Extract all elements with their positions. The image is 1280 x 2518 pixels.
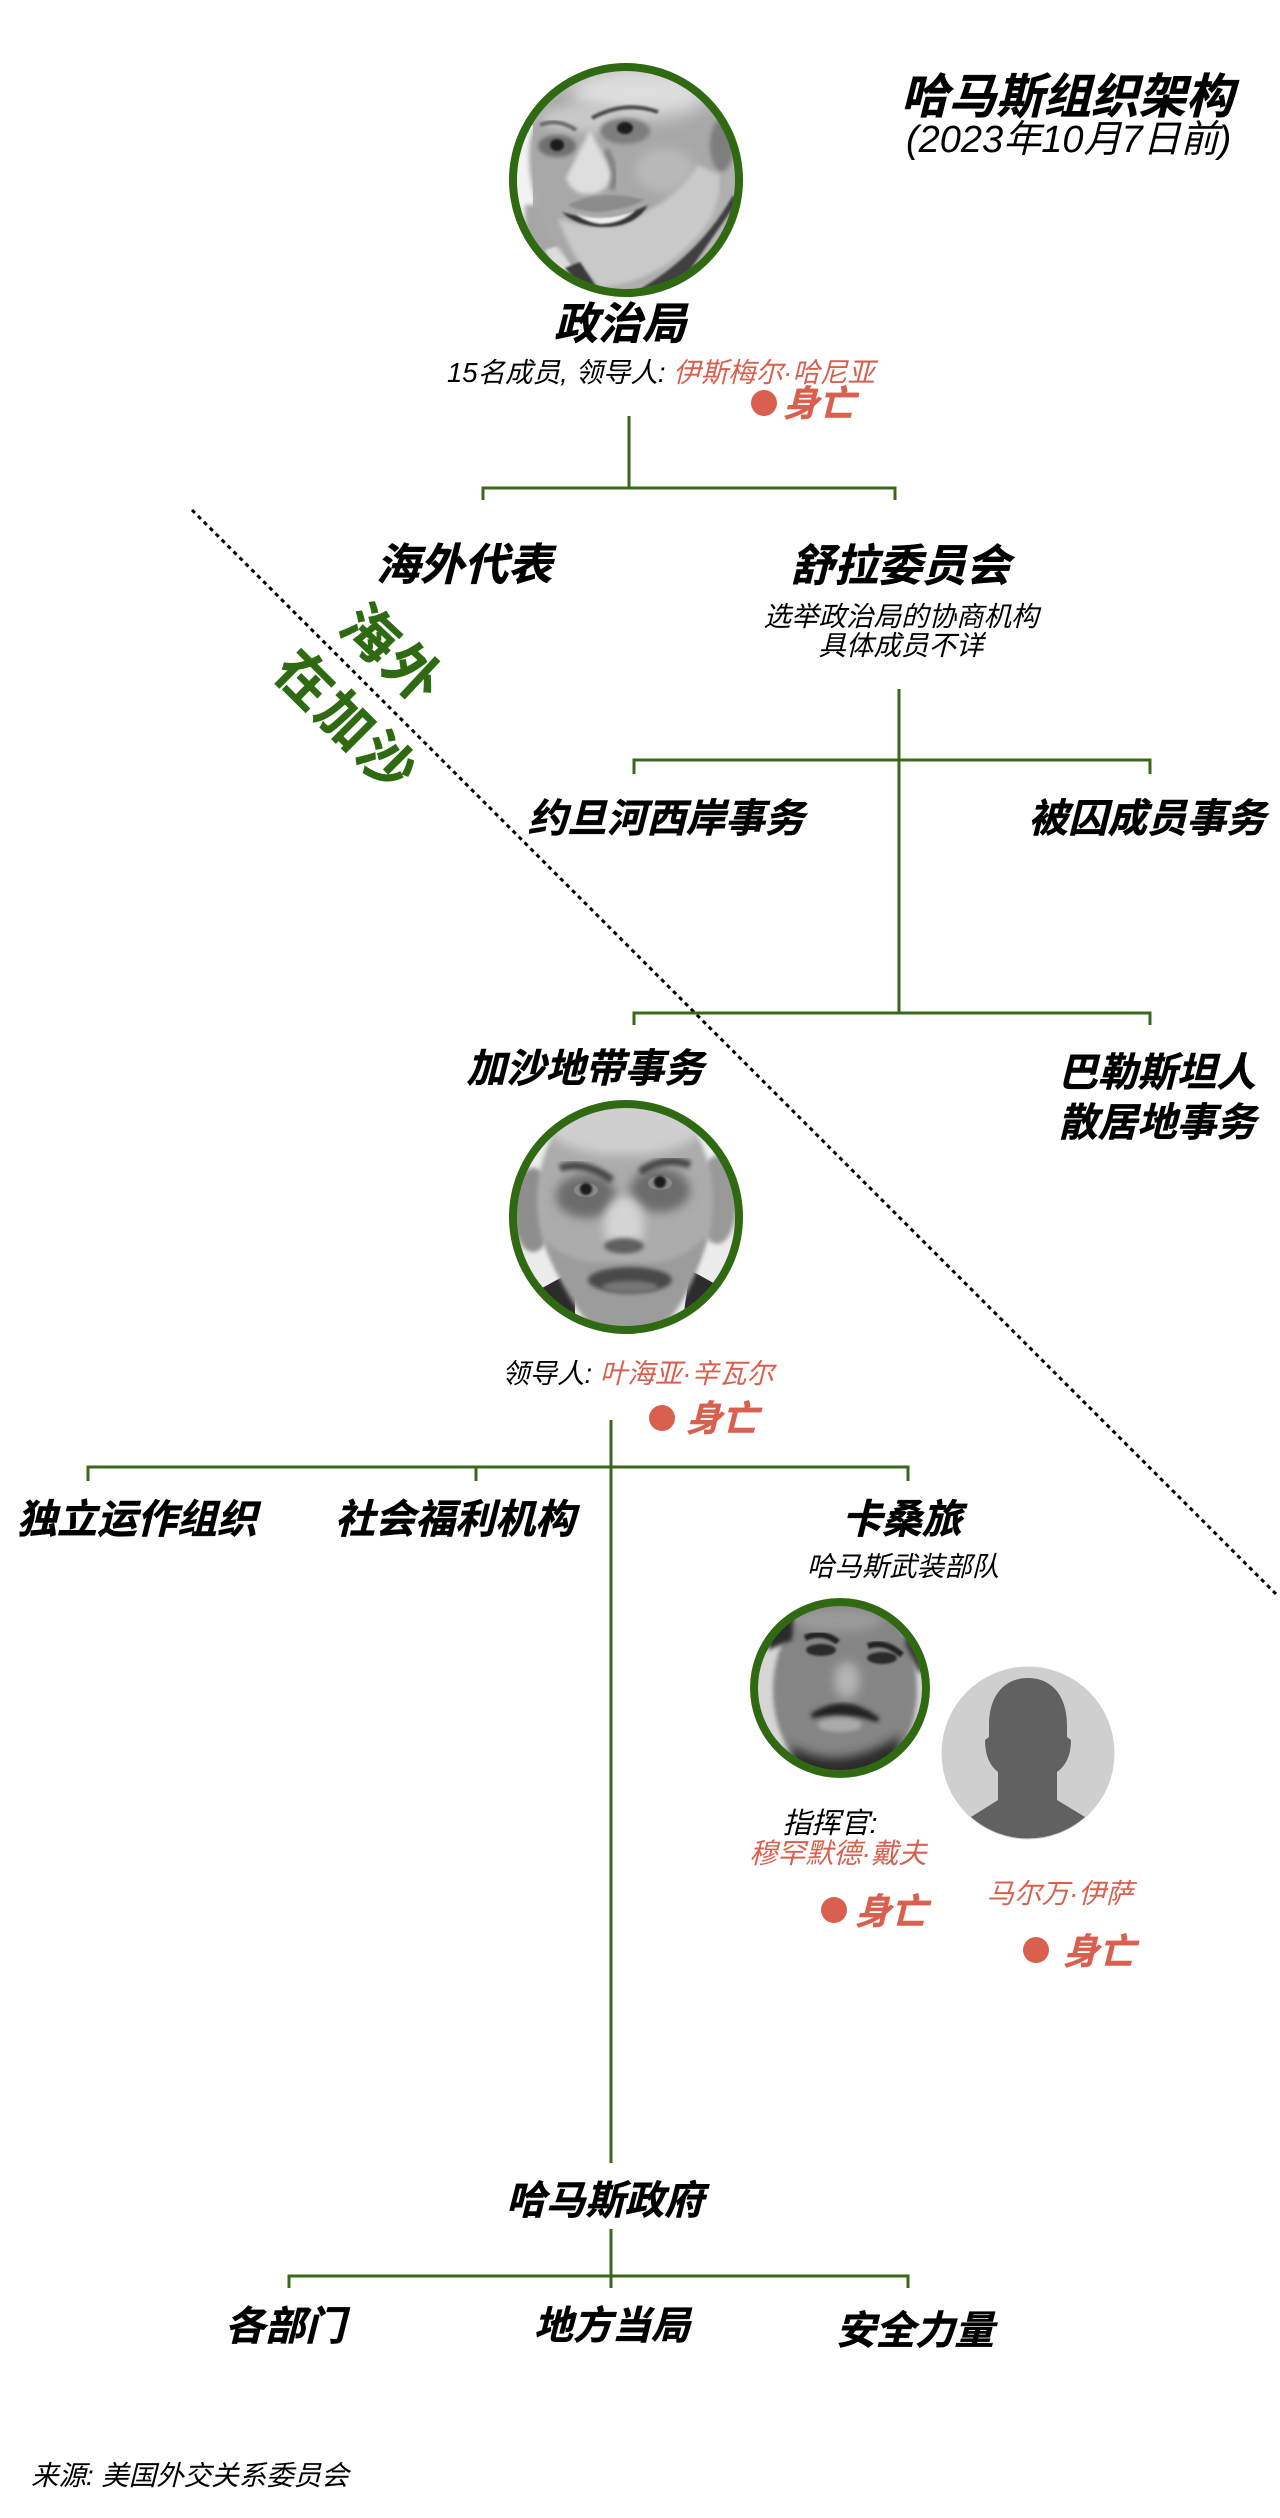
beard	[558, 165, 720, 287]
photo: qassam commander	[750, 1594, 930, 1786]
mouth	[562, 205, 648, 227]
label: in Gaza: 在加沙	[263, 638, 430, 805]
commander caption	[749, 1808, 932, 1932]
status: deceased: 身亡	[1063, 1931, 1140, 1972]
node: local authorities: 地方当局	[534, 2305, 693, 2348]
source note: 来源: 美国外交关系委员会	[31, 2460, 351, 2491]
label: overseas: 海外	[329, 592, 456, 717]
node: overseas representatives: 海外代表	[376, 541, 557, 590]
divider: overseas vs in Gaza	[192, 510, 1277, 1595]
node: social welfare institutions: 社会福利机构	[335, 1498, 580, 1542]
shura description: 具体成员不详	[818, 630, 987, 661]
qassam description: 哈马斯武装部队	[807, 1551, 999, 1582]
nose	[566, 130, 612, 194]
shura description: 选举政治局的协商机构	[764, 601, 1042, 632]
status: deceased	[751, 383, 860, 424]
second person caption	[987, 1878, 1140, 1972]
heading: politburo: 政治局	[554, 300, 689, 349]
shura description	[764, 601, 1042, 661]
node: shura council	[764, 542, 1042, 661]
status: deceased: 身亡	[855, 1891, 932, 1932]
node: palestinian diaspora affairs	[1058, 1051, 1259, 1145]
node: qassam brigades	[807, 1498, 999, 1582]
node: prisoner affairs: 被囚成员事务	[1028, 797, 1269, 841]
connector: shura branches	[634, 689, 1150, 1025]
subtitle: (2023年10月7日前)	[906, 119, 1231, 161]
connector: politburo branches	[483, 416, 895, 500]
status: deceased	[821, 1891, 932, 1932]
commander caption: 穆罕默德·戴夫	[749, 1838, 929, 1869]
photo: gaza leader	[510, 1088, 742, 1340]
node: security forces: 安全力量	[836, 2309, 998, 2353]
node: gaza strip affairs: 加沙地带事务	[466, 1047, 707, 1091]
connector: gaza branches	[88, 1420, 908, 2163]
status: deceased	[1023, 1931, 1140, 1972]
collar	[639, 194, 734, 288]
connector: government branches	[289, 2229, 908, 2288]
node: qassam brigades: 卡桑旅	[842, 1498, 968, 1542]
photo placeholder: unknown person	[942, 1666, 1114, 1840]
moustache	[568, 195, 645, 212]
commander caption: 指挥官:	[782, 1808, 878, 1840]
heading: politburo	[447, 300, 878, 424]
node: palestinian diaspora affairs: 散居地事务	[1058, 1101, 1259, 1145]
node: departments: 各部门	[225, 2305, 351, 2349]
second person caption: 马尔万·伊萨	[987, 1878, 1138, 1909]
status: deceased: 身亡	[686, 1398, 763, 1439]
gaza leader caption: 领导人: 叶海亚·辛瓦尔	[502, 1358, 777, 1389]
title: 哈马斯组织架构	[901, 71, 1240, 124]
eyes	[538, 135, 576, 157]
status: deceased: 身亡	[783, 383, 860, 424]
title	[901, 71, 1240, 161]
status: deceased	[649, 1398, 763, 1439]
node: independent organizations: 独立运作组织	[17, 1498, 262, 1542]
node: hamas government: 哈马斯政府	[506, 2179, 710, 2223]
node: palestinian diaspora affairs: 巴勒斯坦人	[1058, 1051, 1256, 1095]
node: west bank affairs: 约旦河西岸事务	[528, 797, 808, 841]
photo: politburo leader	[513, 66, 745, 293]
node: shura council: 舒拉委员会	[790, 542, 1015, 591]
politburo details: 15名成员, 领导人: 伊斯梅尔·哈尼亚	[447, 357, 878, 388]
gaza leader caption	[502, 1358, 777, 1439]
